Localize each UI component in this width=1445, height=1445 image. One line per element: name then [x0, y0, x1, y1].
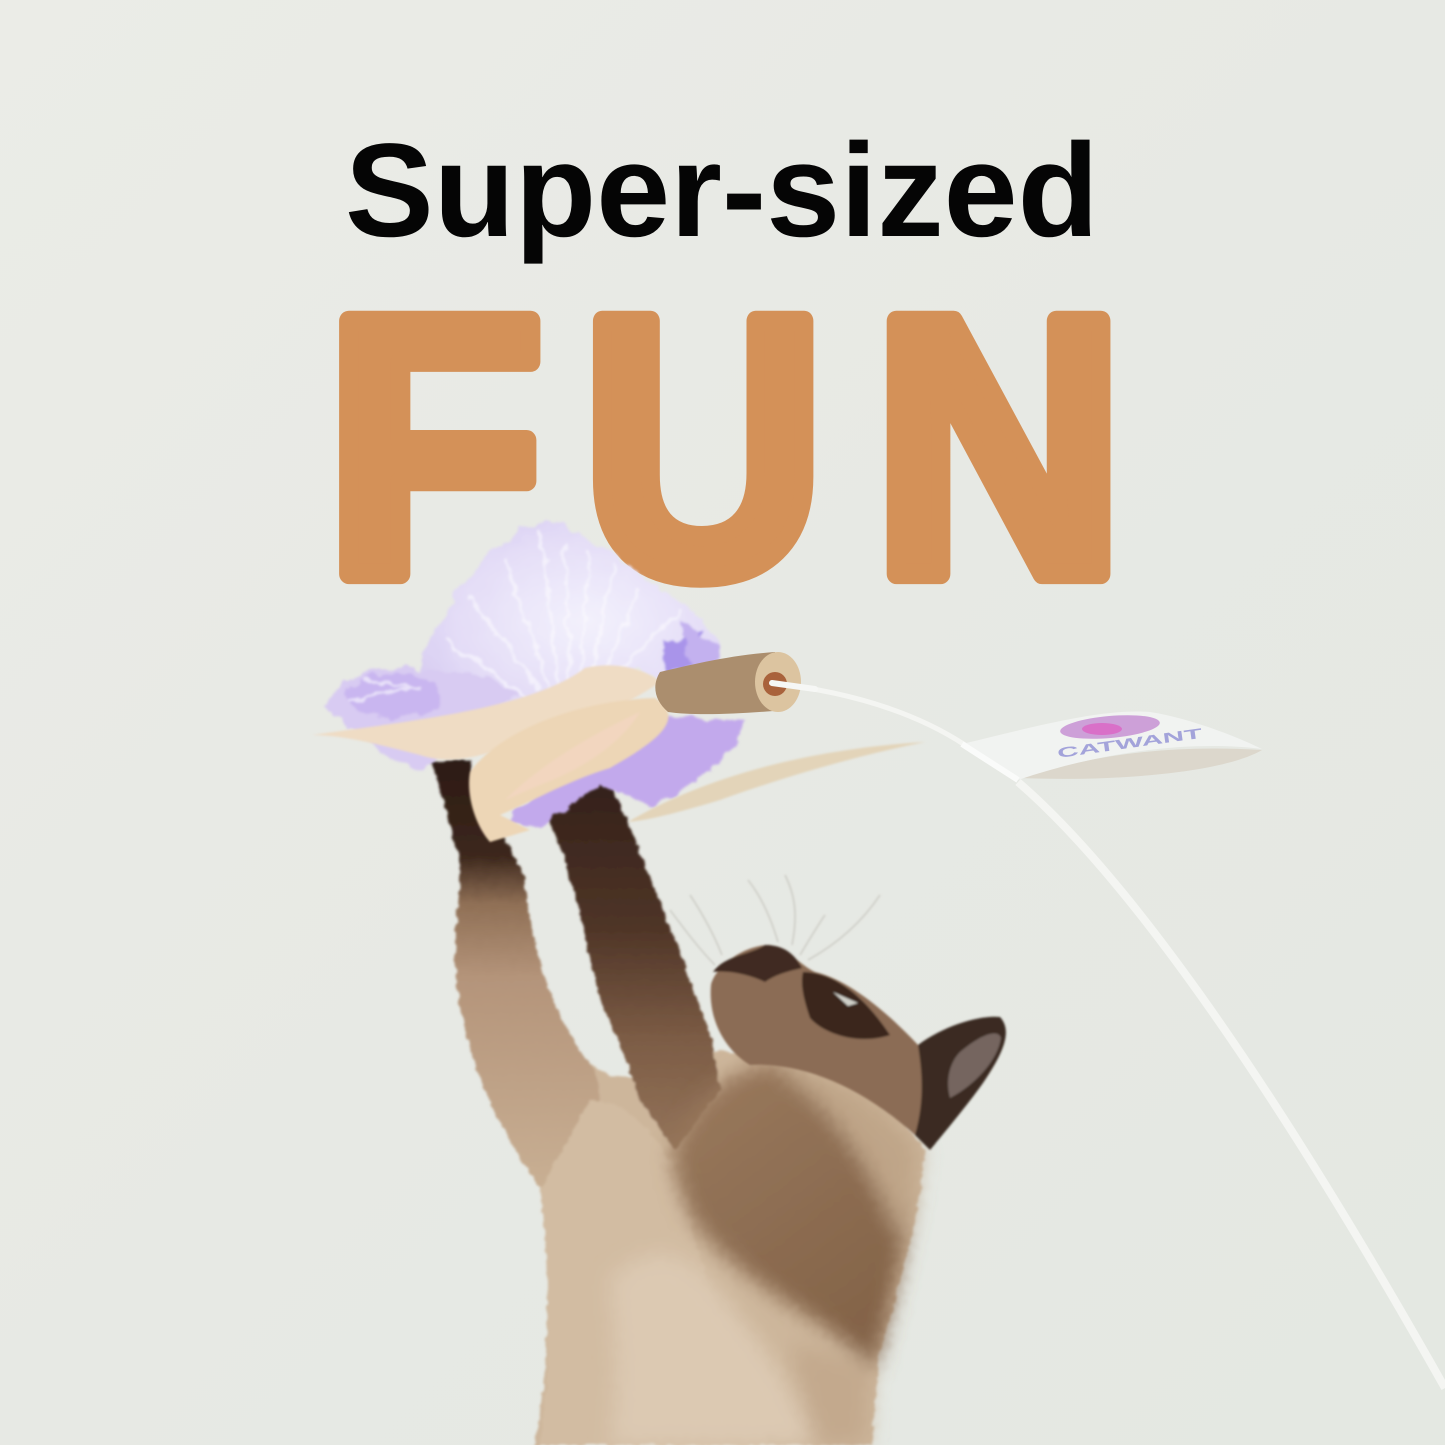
cat neck highlight — [770, 1065, 920, 1240]
cat ear — [915, 1017, 1006, 1150]
cat whiskers — [670, 875, 880, 965]
title: FUN: U — [582, 241, 825, 652]
wand rod upper — [772, 683, 965, 745]
cat left arm — [431, 760, 600, 1195]
puff left — [325, 668, 520, 770]
cat eye highlight — [833, 992, 858, 1006]
right feather — [628, 742, 925, 822]
catnip cylinder — [655, 652, 785, 714]
feather peach accent — [505, 712, 640, 800]
left feather — [312, 665, 660, 759]
head shape — [711, 945, 923, 1135]
wand tip — [772, 683, 815, 689]
title: Super-sized: Super-sized — [345, 117, 1099, 265]
feather toy — [312, 522, 925, 842]
wand rod lower — [1018, 782, 1445, 1388]
puff lower right — [505, 715, 745, 828]
flag label — [962, 711, 1262, 780]
cat lower right tan — [790, 1345, 870, 1445]
cat eye patch — [802, 972, 890, 1039]
cat right arm — [538, 780, 720, 1150]
cat — [431, 760, 925, 1445]
puff purple side — [680, 620, 722, 690]
cat muzzle — [713, 945, 802, 982]
cat chest shading — [672, 1062, 915, 1370]
cylinder hole — [763, 672, 787, 696]
cat body — [535, 1050, 925, 1445]
title: FUN: N — [873, 241, 1124, 652]
cat lower fore body — [540, 1100, 770, 1445]
cat toy wand — [772, 683, 1445, 1388]
lavender puff — [325, 522, 745, 828]
cat soft fur shading — [610, 1062, 920, 1445]
title: FUN — [325, 240, 1124, 652]
cat inner ear — [948, 1033, 1001, 1098]
flag logo — [1059, 712, 1161, 742]
puff left accent — [347, 673, 443, 717]
flag shadow side — [1020, 748, 1262, 779]
cat belly highlight — [610, 1254, 815, 1445]
puff top — [420, 522, 722, 720]
puff blue accent — [662, 630, 705, 672]
flag band — [962, 744, 1018, 780]
title: FUN: F — [325, 240, 544, 652]
flag brand text: CATWANT — [1056, 725, 1204, 761]
cylinder end — [755, 652, 801, 712]
puff fibres — [350, 530, 680, 700]
cat head — [670, 875, 1006, 1150]
centre feather — [469, 698, 668, 842]
